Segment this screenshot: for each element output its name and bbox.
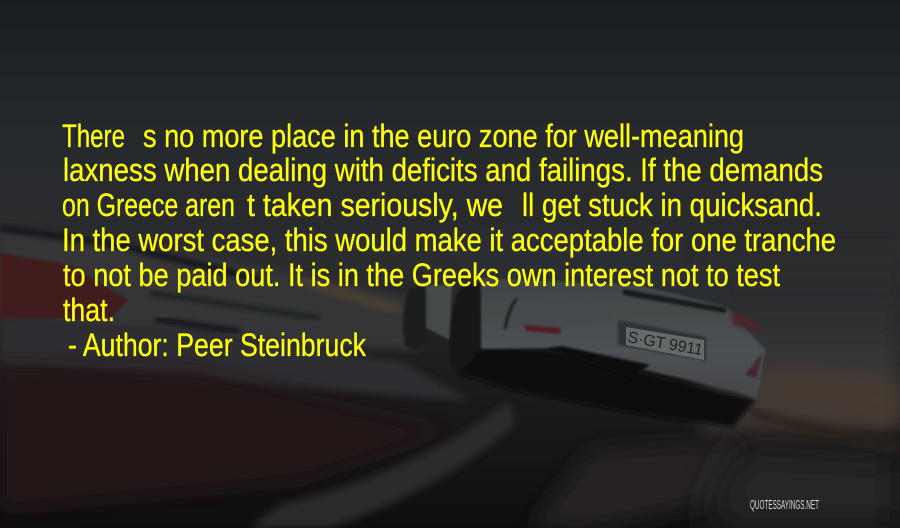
line 1: s no more place in the euro zone for well-meaning [143,118,744,154]
lower bumper exhaust [548,346,650,378]
tail recess [505,299,612,329]
line 3: on Greece aren [62,187,235,223]
line 3 [62,187,822,223]
line 6: that. [63,292,115,328]
author attribution: - Author: Peer Steinbruck [68,327,367,363]
front wheel [403,286,427,349]
shadow under car [457,345,756,427]
text: QUOTESSAYINGS.NET [750,497,819,512]
car roof and window [445,222,735,310]
line 3: t taken seriously, we [247,187,503,223]
body between wheels [426,285,452,340]
tail lights [731,310,760,333]
licence plate: S·GT 9911 [626,329,704,359]
red reflector [525,325,561,334]
spoiler [623,289,727,313]
quote text [62,118,836,363]
illustration: white sports car [403,222,765,427]
line 3: ll get stuck in quicksand. [522,187,822,223]
rear wheel [450,283,481,369]
line 5: to not be paid out. It is in the Greeks own interest not to test [63,257,780,293]
licence plate [618,320,706,361]
car body [481,278,765,400]
line 1: There [62,118,125,154]
